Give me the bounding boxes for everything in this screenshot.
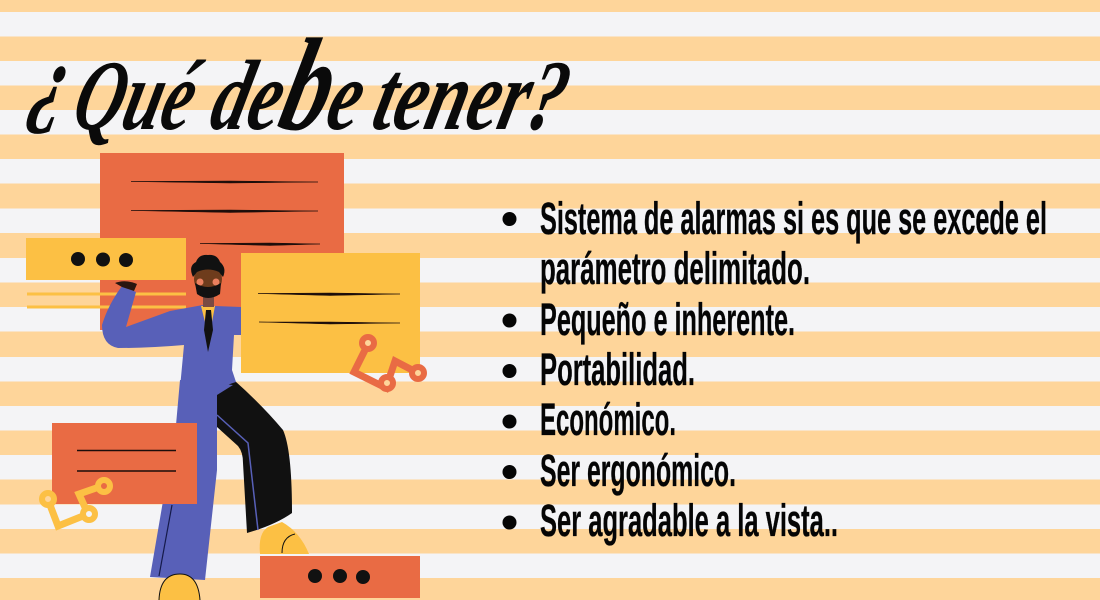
yellow dots box	[26, 238, 186, 307]
list item 6	[502, 495, 838, 546]
icon: yellow connector	[42, 480, 110, 526]
bottom red dots box	[260, 556, 420, 598]
icon: orange connector	[354, 337, 424, 389]
list item 3	[502, 344, 695, 395]
list item 2: Pequeño e inherente.	[540, 294, 795, 345]
black leg	[216, 381, 292, 533]
title: Qué	[64, 40, 211, 151]
hair	[191, 255, 224, 277]
left shoe	[159, 574, 200, 600]
beard	[195, 283, 221, 298]
blue leg	[150, 380, 233, 580]
yellow message box	[241, 253, 420, 373]
jacket and arm	[102, 286, 241, 390]
list item 5	[502, 445, 736, 496]
title: tener?	[364, 40, 581, 151]
bullet list	[502, 193, 1047, 546]
illustration: person with message boxes	[26, 153, 424, 600]
lower left red message box	[52, 423, 197, 504]
list item 4: Económico.	[540, 394, 676, 445]
collar and tie	[201, 306, 215, 322]
list item 1: parámetro delimitado.	[540, 243, 810, 294]
neck	[203, 297, 214, 307]
list item 5: Ser ergonómico.	[540, 445, 736, 496]
list item 4	[502, 394, 676, 445]
title: debe	[200, 12, 384, 158]
large red message box	[100, 153, 344, 330]
list item 1	[502, 193, 1047, 294]
list item 2	[502, 294, 795, 345]
face	[194, 264, 222, 294]
list item 6: Ser agradable a la vista..	[540, 495, 838, 546]
title: ¿	[22, 24, 85, 135]
list item 3: Portabilidad.	[540, 344, 695, 395]
person	[102, 255, 309, 600]
hand	[115, 281, 137, 291]
title	[22, 12, 581, 158]
right shoe	[260, 522, 309, 554]
